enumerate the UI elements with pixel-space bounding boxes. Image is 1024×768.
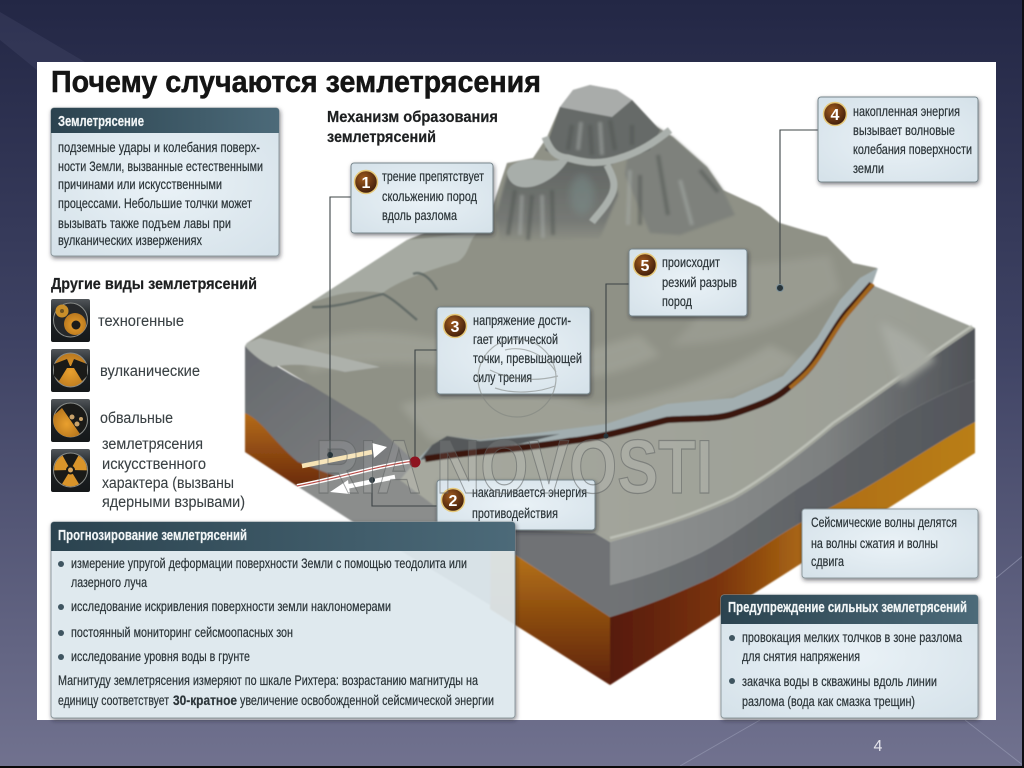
- panel: seismic waves: [802, 509, 978, 578]
- number badge 3: [444, 314, 466, 338]
- number badge 5: 5: [641, 258, 650, 275]
- icon: nuclear: [51, 449, 90, 492]
- number badge 3: 3: [451, 319, 460, 336]
- right face upper layer: [610, 328, 975, 585]
- callout 3 text: гает критической: [473, 331, 558, 347]
- seismic text: сдвига: [811, 553, 844, 569]
- number badge 4: [824, 102, 846, 126]
- surface behind fault: [245, 85, 877, 462]
- label: nuclear: ядерными взрывами): [102, 494, 245, 511]
- left corner ridge: [245, 338, 380, 372]
- header text: Землетрясение: [58, 114, 144, 130]
- callout 5 text: [662, 254, 737, 309]
- callout 3 text: точки, превышающей: [473, 350, 582, 366]
- callout 5: [629, 249, 747, 316]
- watermark text: RIA NOVOSTI: [315, 425, 713, 510]
- callout 4 text: вызывает волновые: [853, 122, 955, 138]
- mountain lower plateau: [507, 158, 570, 187]
- mountain ridge band: [545, 130, 670, 222]
- richter note: увеличение освобожденной сейсмической энергии: [240, 692, 494, 708]
- heading: mechanism: землетрясений: [327, 129, 436, 146]
- callout 5 text: происходит: [662, 254, 720, 270]
- surface far right swirl: [880, 322, 935, 385]
- watermark globe: [478, 339, 558, 417]
- title: Почему случаются землетрясения: [51, 64, 541, 99]
- label: nuclear: [102, 436, 245, 511]
- label: technogenic: техногенные: [98, 313, 184, 330]
- body text: вызывать также подъем лавы при: [58, 215, 231, 231]
- callout 3: [437, 307, 590, 394]
- fault line red core: [297, 461, 415, 486]
- back ridge: [310, 232, 478, 303]
- icon: volcanic: [51, 349, 90, 392]
- number badge 1: [354, 170, 378, 194]
- richter note: единицу соответствует: [58, 692, 169, 708]
- forecasting list: [71, 555, 467, 664]
- prevention header: [721, 595, 978, 624]
- surface front light band: [610, 326, 972, 538]
- callout 4 text: накопленная энергия: [853, 103, 960, 119]
- mountain lower cone: [496, 155, 618, 243]
- icon: technogenic gears: [51, 299, 90, 342]
- terrain block diagram: [245, 85, 975, 685]
- callout 1 text: скольжению пород: [382, 188, 477, 204]
- left face corner orange: [490, 538, 610, 685]
- left face lower block: [297, 462, 517, 605]
- fault lip: [415, 268, 878, 462]
- surface wave bands: [300, 255, 840, 445]
- forecasting list: исследование искривления поверхности земли наклономерами: [71, 598, 391, 614]
- body text: причинами или искусственными: [58, 176, 222, 192]
- label: landslide: обвальные: [100, 410, 173, 427]
- heading: mechanism: [327, 109, 498, 146]
- callout 4 text: колебания поверхности: [853, 141, 972, 157]
- blue glow on lower cone: [570, 175, 594, 215]
- callout 2 text: [472, 484, 587, 521]
- callout 1 text: трение препятствует: [382, 168, 484, 184]
- icon: landslide: [51, 399, 90, 442]
- leader dots: [327, 284, 784, 483]
- forecasting title: Прогнозирование землетрясений: [58, 528, 247, 544]
- arrow: lower movement: [330, 477, 395, 494]
- left face orange layer: [245, 413, 335, 486]
- panel: prevention: [721, 595, 978, 718]
- prevention list: [742, 629, 962, 709]
- mountain top plateau: [560, 85, 632, 117]
- heading: mechanism: Механизм образования: [327, 109, 498, 126]
- right face dark layer: [610, 380, 975, 617]
- prevention list: закачка воды в скважины вдоль линии: [742, 673, 937, 689]
- label: volcanic: вулканические: [100, 363, 200, 380]
- right face orange brown layer: [610, 422, 975, 685]
- callout 1 text: вдоль разлома: [382, 207, 457, 223]
- callout 4 text: земли: [853, 160, 884, 176]
- body text: подземные удары и колебания поверх-: [58, 139, 260, 155]
- left face upper: [245, 346, 415, 486]
- prevention list: для снятия напряжения: [742, 648, 860, 664]
- mountain streaks: [508, 120, 718, 240]
- forecasting list: постоянный мониторинг сейсмоопасных зон: [71, 624, 293, 640]
- callout 5 text: пород: [662, 293, 692, 309]
- seismic text: [811, 514, 957, 569]
- body text: вулканических извержениях: [58, 232, 202, 248]
- number badge 2: [442, 488, 464, 512]
- mountain right flank: [625, 115, 735, 235]
- forecasting header: [51, 522, 515, 551]
- heading: other types: Другие виды землетрясений: [51, 276, 257, 293]
- richter note: Магнитуду землетрясения измеряют по шкале Рихтера: возрастанию магнитуды на: [58, 672, 478, 688]
- number badge 1: 1: [362, 175, 371, 192]
- prevention list: провокация мелких толчков в зоне разлома: [742, 629, 962, 645]
- prevention list: разлома (вода как смазка трещин): [742, 693, 915, 709]
- label: nuclear: характера (вызваны: [102, 475, 234, 492]
- panel header: [51, 108, 279, 133]
- forecasting list: лазерного луча: [71, 574, 147, 590]
- callout 3 text: [473, 312, 582, 385]
- body text: [58, 139, 263, 248]
- callout 2 text: накапливается энергия: [472, 484, 587, 500]
- callout 1: [351, 163, 493, 233]
- panel: forecasting: [51, 522, 515, 718]
- forecasting list: исследование уровня воды в грунте: [71, 648, 250, 664]
- seismic text: Сейсмические волны делятся: [811, 514, 957, 530]
- body text: ности Земли, вызванные естественными: [58, 158, 263, 174]
- left face corner gray: [490, 520, 610, 617]
- richter note: 30-кратное: [173, 692, 237, 708]
- callout 2 text: противодействия: [472, 505, 558, 521]
- mountain light streaks: [520, 122, 692, 238]
- body text: процессами. Небольшие толчки может: [58, 195, 252, 211]
- slide number: 4: [874, 738, 883, 755]
- seismic text: на волны сжатия и волны: [811, 535, 938, 551]
- callout 4 text: [853, 103, 972, 176]
- prevention bullets: [729, 635, 735, 684]
- callout 5 text: резкий разрыв: [662, 274, 737, 290]
- number badge 4: 4: [831, 107, 840, 124]
- callout 3 text: напряжение дости-: [473, 312, 571, 328]
- fault crack: [425, 284, 872, 459]
- richter note: [58, 672, 494, 708]
- callout 3 text: силу трения: [473, 369, 532, 385]
- number badge 2: 2: [449, 493, 458, 510]
- label: nuclear: искусственного: [102, 456, 206, 473]
- fault line: [297, 461, 415, 486]
- arrow: upper movement: [302, 443, 387, 466]
- forecasting list: измерение упругой деформации поверхности Земли с помощью теодолита или: [71, 555, 467, 571]
- forecasting bullets: [58, 561, 64, 660]
- label: nuclear: землетрясения: [102, 436, 203, 453]
- callout 4: [818, 97, 978, 182]
- callout 1 text: [382, 168, 484, 223]
- fault cliff dark left: [420, 434, 560, 460]
- surface front of fault: [400, 285, 975, 542]
- fault orange seam: [790, 284, 873, 388]
- back ridge cracks: [312, 273, 437, 320]
- panel: definition: [51, 108, 279, 256]
- callout leader lines: [330, 130, 818, 506]
- callout 2: [437, 480, 595, 530]
- mountain upper cone: [545, 100, 660, 165]
